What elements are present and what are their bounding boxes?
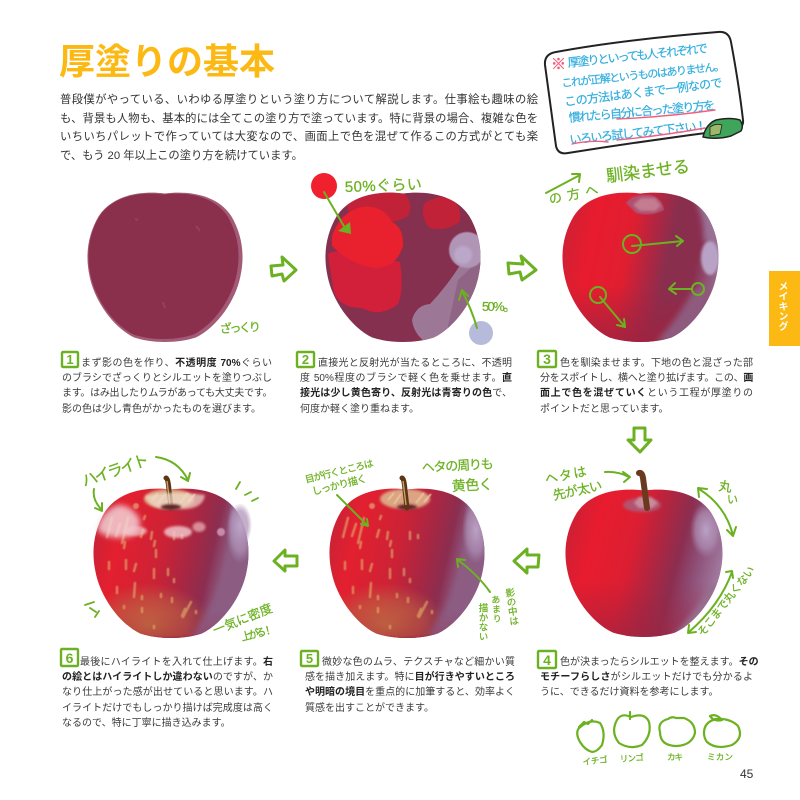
- badge: step number 3: 3: [543, 351, 551, 367]
- callout: handwritten note: いろいろ試してみて下さい！: [569, 119, 708, 147]
- text: step 6: 最後にハイライトを入れて仕上げます。右: [80, 656, 273, 668]
- icon: strawberry: [577, 720, 604, 752]
- apple: refined silhouette: [560, 473, 728, 640]
- handwritten note: in the shadow: [476, 587, 519, 641]
- intro text: で、もう 20 年以上この塗り方を続けています。: [60, 150, 303, 162]
- badge: step number 3: [538, 351, 556, 367]
- panel: step 5: [300, 456, 519, 714]
- callout: handwritten note: [544, 30, 744, 154]
- panel: step 4: [536, 464, 759, 781]
- text: step 6: なるので、特に丁寧に描き込みます。: [62, 718, 231, 729]
- intro text: も、背景も人物も、基本的には全てこの塗り方で塗っています。特に背景の場合、複雑な色を: [60, 112, 538, 124]
- text: step 6: [62, 656, 273, 729]
- handwritten note: around the stem: [421, 456, 494, 494]
- handwritten note: not that round: そこまで丸くない: [695, 564, 758, 639]
- text: step 2: 直接光と反射光が当たるところに、不透明: [318, 358, 512, 368]
- handwritten note: blend toward this side: [548, 157, 691, 207]
- text: step 2: 接光は少し黄色寄り、反射光は青寄りの色で、: [300, 388, 512, 399]
- arrow: direction of blending: [546, 174, 580, 193]
- arrow: step 5 to 6: [272, 548, 298, 573]
- intro text: [60, 93, 538, 162]
- arrow: round curve: [698, 488, 736, 536]
- handwritten note: density jumps: 上がる！: [239, 622, 275, 644]
- text: step 1: 影の色は少し青色がかったものを選びます。: [62, 404, 261, 415]
- apple: texture and detail: [323, 478, 490, 667]
- handwritten note: highlight: ハイライト: [80, 452, 151, 491]
- handwritten note: roughly: ざっくり: [219, 319, 261, 336]
- apple: finished with highlights: [87, 478, 254, 667]
- badge: step number 1: [62, 352, 78, 367]
- text: step 5: 質感を出すことができます。: [305, 703, 434, 714]
- handwritten note: in the shadow: 影の中は: [503, 587, 519, 626]
- text: step 1: のブラシでざっくりとシルエットを塗りつぶし: [62, 373, 272, 384]
- handwritten note: where the eye goes: 目が行くところは: [304, 457, 375, 486]
- handwritten note: where the eye goes: [304, 457, 375, 498]
- panel: step 6: [60, 452, 275, 729]
- arrow: highlight to shoulder: [94, 489, 102, 511]
- handwritten note: stem: ヘタは: [544, 464, 588, 487]
- badge: step number 1: 1: [66, 352, 74, 367]
- icon: apple: [614, 712, 650, 747]
- accent ticks: [85, 482, 258, 617]
- arrow: step 1 to 2: [270, 256, 298, 283]
- arrow: red dab to apple: [324, 192, 351, 234]
- badge: step number 5: 5: [306, 651, 313, 666]
- text: step 4: モチーフらしさがシルエットだけでも分かるよ: [540, 672, 753, 683]
- handwritten note: density jumps: 一気に密度: [211, 600, 275, 638]
- text: step 5: や明暗の境目を重点的に加筆すると、効率よく: [305, 687, 515, 698]
- handwritten note: stem: 先が太い: [552, 478, 604, 503]
- arrow: not so round curve: [688, 571, 733, 633]
- arrow: step 4 to 5: [512, 548, 540, 575]
- intro text: いちいちパレットで作っていては大変なので、画面上で色を混ぜて作るこの方式がとても楽: [60, 131, 538, 143]
- fruit labels: イチゴ: [582, 754, 608, 767]
- handwritten note: blend toward this side: 馴染ませる: [605, 157, 691, 186]
- text: step 3: 色を馴染ませます。下地の色と混ざった部: [560, 358, 753, 368]
- panel: step 1: [60, 192, 272, 415]
- text: step 5: 感を描き加えます。特に目が行きやすいところ: [305, 672, 515, 683]
- icon: persimmon: [659, 717, 695, 746]
- text: step 3: 分をスポイトし、横へと塗り拡げます。この、画: [540, 373, 753, 384]
- handwritten note: 50%: 50%ぐらい: [345, 176, 422, 196]
- badge: step number 4: [538, 651, 556, 668]
- icon: mandarin: [704, 715, 740, 747]
- callout: handwritten note: この方法はあくまで一例なので: [564, 75, 723, 109]
- arrow: to shadow area: [457, 559, 490, 592]
- fruit labels: カキ: [667, 752, 683, 762]
- intro text: 普段僕がやっている、いわゆる厚塗りという塗り方について解説します。仕事絵も趣味の絵: [60, 94, 538, 106]
- sidebar tab: メイキング: [776, 281, 787, 331]
- text: step 6: なり仕上がった感が出せていると思います。ハ: [62, 687, 273, 698]
- handwritten note: round: 丸: [718, 478, 733, 495]
- handwritten note: round: [718, 478, 738, 506]
- text: step 5: 微妙な色のムラ、テクスチャなど細かい質: [322, 656, 515, 668]
- badge: step number 2: [297, 352, 314, 367]
- arrow: step 3 to 4: [626, 426, 652, 454]
- brush dab: lavender: [469, 321, 493, 345]
- brush dab: red: [311, 173, 337, 199]
- text: step 5: [305, 656, 515, 714]
- text: step 3: ポイントだと思っています。: [540, 404, 668, 415]
- fruit labels: ミカン: [707, 752, 733, 762]
- panel: step 2: [296, 173, 516, 415]
- text: step 3: [540, 357, 753, 415]
- sidebar tab: [769, 271, 800, 346]
- apple: base colour with red and lavender blocks: [325, 192, 490, 345]
- text: step 3: 面上で色を混ぜていくという工程が厚塗りの: [540, 388, 753, 399]
- apple: flat shadow silhouette: [87, 193, 243, 342]
- fruit silhouettes: [577, 712, 740, 752]
- arrow: highlight to stem: [156, 457, 190, 481]
- handwritten note: 50 percent: 50%。: [482, 299, 516, 314]
- text: step 4: うに、できるだけ資料を参考にします。: [540, 687, 718, 698]
- arrow: lavender dab to apple: [459, 290, 477, 328]
- badge: step number 5: [301, 651, 318, 666]
- handwritten note: round: い: [727, 494, 738, 506]
- panel: step 3: [536, 157, 753, 415]
- text: step 1: [62, 357, 272, 415]
- title: 厚塗りの基本: [59, 41, 275, 82]
- callout: handwritten note: 厚塗りといっても人それぞれで: [567, 41, 709, 70]
- badge: step number 6: [61, 649, 78, 666]
- handwritten note: in the shadow: 描かない: [476, 602, 488, 641]
- arrow: to highlight area: [337, 495, 368, 526]
- text: step 2: 度 50%程度のブラシで軽く色を乗せます。直: [300, 373, 512, 384]
- badge: step number 6: 6: [66, 650, 74, 666]
- text: step 1: まず影の色を作り、不透明度 70%ぐらい: [81, 358, 272, 368]
- callout: handwritten note: 慣れたら自分に合った塗り方を: [568, 97, 716, 125]
- text: step 4: 色が決まったらシルエットを整えます。その: [560, 656, 759, 668]
- text: step 4: [540, 656, 759, 698]
- handwritten note: around the stem: 黄色く: [451, 476, 493, 494]
- callout: handwritten note: これが正解というものはありません。: [561, 59, 725, 90]
- callout: handwritten note: ※: [551, 56, 566, 73]
- text: step 6: の絵とはハイライトしか違わないのですが、か: [62, 672, 273, 683]
- arrow: to stem: [605, 472, 630, 482]
- text: step 1: ます。はみ出したりムラがあっても大丈夫です。: [62, 388, 272, 399]
- text: step 2: [300, 357, 512, 415]
- fruit labels: [582, 752, 733, 767]
- handwritten note: in the shadow: あまり: [490, 595, 502, 623]
- handwritten note: stem: [544, 464, 604, 503]
- page number: 45: [740, 767, 754, 781]
- handwritten note: blend toward this side: の方へ: [548, 182, 600, 207]
- arrow: step 2 to 3: [506, 254, 538, 282]
- text: step 2: 何度か軽く塗り重ねます。: [300, 404, 419, 415]
- fruit labels: リンゴ: [619, 752, 644, 764]
- blend markers: circles and arrows: [590, 235, 704, 327]
- badge: step number 4: 4: [543, 652, 551, 668]
- handwritten note: where the eye goes: しっかり描く: [311, 472, 368, 498]
- text: step 6: イライトだけでもしっかり描けば完成度は高く: [62, 703, 273, 714]
- apple: blended colours: [560, 188, 722, 346]
- badge: step number 2: 2: [302, 352, 309, 367]
- handwritten note: around the stem: ヘタの周りも: [421, 456, 494, 475]
